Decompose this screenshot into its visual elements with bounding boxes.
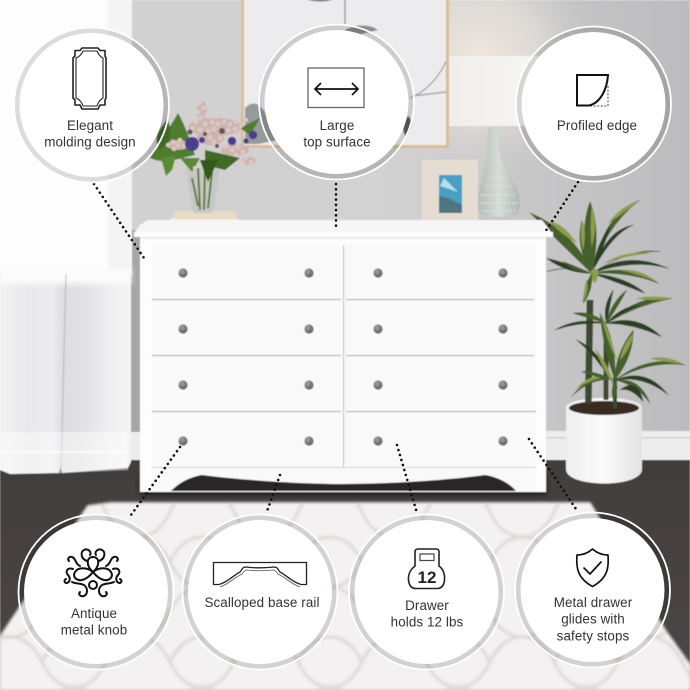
purple flowers: [185, 131, 257, 151]
label: glides with: [561, 612, 625, 627]
label: top surface: [303, 135, 371, 150]
base rail with scallop cutout: [152, 467, 536, 491]
icon: quarter round edge: [577, 75, 608, 106]
blossoms: [166, 101, 257, 174]
plant pot: [566, 398, 642, 484]
baseboard: [128, 431, 690, 462]
dotted leader: top surface: [335, 184, 337, 226]
dotted leader: molding: [94, 184, 144, 258]
knobs: [178, 268, 508, 446]
callout: large top surface: [259, 24, 414, 180]
dotted leader: profiled edge: [545, 182, 578, 232]
label: Large: [320, 118, 354, 133]
icon: width arrow: [308, 68, 364, 108]
vase with flowers: [150, 101, 260, 226]
icon: shield with check: [577, 549, 608, 586]
lower crown: [572, 313, 685, 403]
icon: kettlebell 12: [408, 549, 445, 588]
table lamp: [449, 56, 539, 227]
label: Profiled edge: [557, 118, 637, 133]
dotted leader: drawer capacity: [397, 445, 417, 513]
label: Elegant: [67, 118, 113, 133]
callout: scalloped base rail: [182, 514, 338, 670]
callout: drawer holds 12 lbs: [349, 514, 504, 670]
stems: [588, 300, 590, 403]
books: [171, 211, 237, 226]
wall shadow beside curtain: [128, 230, 142, 435]
icon: kettlebell 12: 12: [418, 568, 436, 587]
blossom clouds: [167, 101, 256, 165]
label: molding design: [44, 135, 136, 150]
top surface: [134, 220, 552, 237]
shag rug: [0, 503, 690, 690]
callout: antique metal knob: [18, 514, 174, 670]
dresser shadow on floor: [140, 475, 546, 495]
label: holds 12 lbs: [391, 614, 464, 629]
label: metal knob: [61, 623, 127, 638]
label: Scalloped base rail: [204, 595, 320, 610]
label: Metal drawer: [554, 595, 633, 610]
vase: [186, 168, 220, 213]
soil: [569, 401, 639, 415]
label: Antique: [71, 606, 117, 621]
drawers: [152, 245, 536, 468]
callout: elegant molding design: [14, 28, 169, 182]
lamp glow on wall: [360, 0, 600, 230]
middle crown: [555, 290, 672, 337]
floor-standing plant: [530, 200, 685, 408]
label: safety stops: [557, 628, 630, 643]
dresser: [134, 220, 553, 492]
icon: molding panel: [73, 48, 106, 109]
callout: profiled edge: [516, 26, 671, 182]
floor: [0, 460, 690, 690]
dotted leader: base rail: [266, 475, 280, 514]
photo frame: [422, 160, 478, 227]
icon: base rail profile: [214, 562, 306, 587]
icon: ornament swirl: [64, 549, 122, 596]
body: [140, 235, 546, 492]
label: Drawer: [405, 598, 449, 613]
foliage: [150, 113, 260, 182]
dotted leader: knob: [131, 447, 180, 515]
wall: [0, 0, 690, 465]
framed art: [241, 0, 449, 148]
callout: metal drawer glides: [515, 512, 670, 668]
dark blossom shadows: [187, 128, 225, 148]
upper crown: [530, 200, 668, 303]
dotted leader: drawer glides: [529, 439, 578, 512]
sheer curtain: [0, 0, 132, 474]
